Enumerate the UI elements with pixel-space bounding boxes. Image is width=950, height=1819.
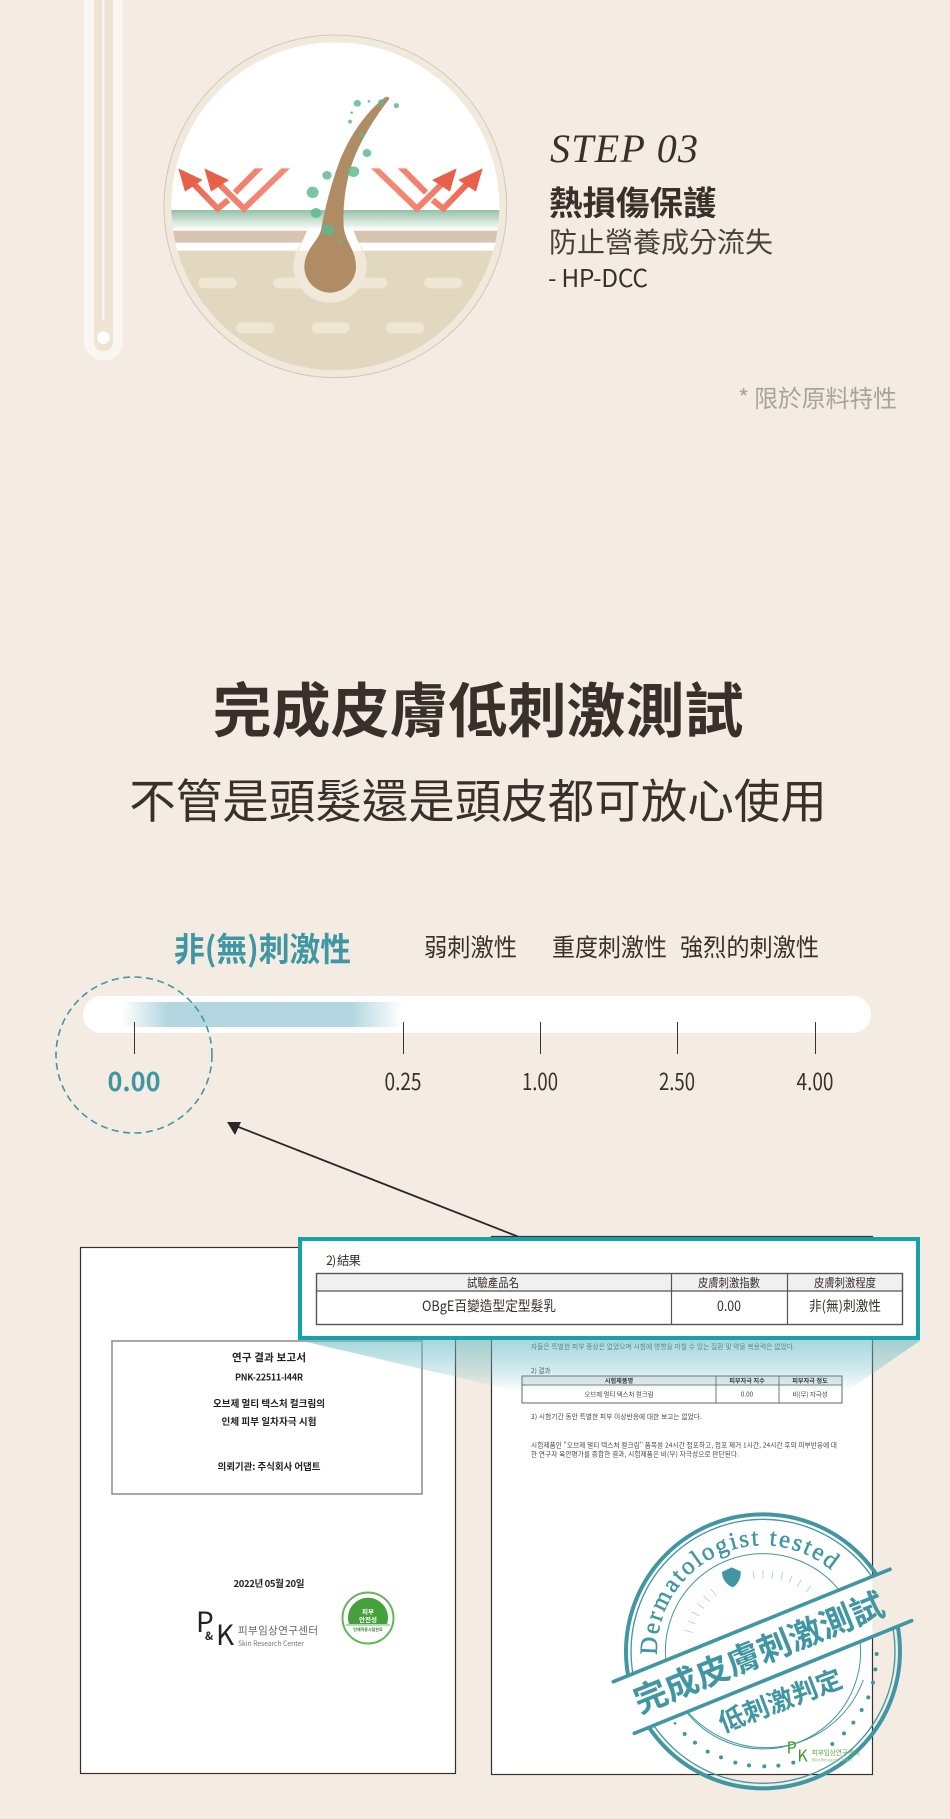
level labels: 重度刺激性 (552, 929, 667, 964)
document: results page: 시험제품인 "오브제 멀티 텍스처 컬크림" 품목을 24시간 첩포하고, 첩포 제거 1시간, 24시간 후의 피부반응에 대 (531, 1440, 837, 1450)
step text block: STEP 03 (550, 126, 698, 171)
footnote: * 限於原料特性 (738, 379, 897, 414)
stamp curved text: Dermatologist tested (640, 1531, 840, 1654)
P&K logo: K (216, 1614, 234, 1654)
step text block: 熱損傷保護 (549, 176, 716, 225)
P&K logo: P (196, 1601, 214, 1641)
small results table (522, 1376, 842, 1403)
green safety badge (342, 1592, 394, 1644)
level labels: 強烈的刺激性 (680, 929, 819, 964)
stamp: dermatologist tested (611, 1512, 914, 1790)
left reflected arrows (178, 161, 293, 209)
cover text: 인체 피부 일차자극 시험 (222, 1414, 316, 1428)
sub heading: 不管是頭髮還是頭皮都可放心使用 (129, 765, 827, 832)
scale values: 4.00 (796, 1063, 834, 1097)
small results table: 피부자극 정도 (792, 1376, 828, 1385)
cover text: 연구 결과 보고서 (232, 1350, 306, 1365)
P&K logo: 피부임상연구센터 (238, 1623, 318, 1638)
step text block: 防止營養成分流失 (549, 221, 773, 261)
small results table: 오브제 멀티 텍스처 컬크림 (585, 1390, 654, 1398)
small results table: 0.00 (741, 1390, 754, 1398)
stamp small P&K logo: Skin Research Center (812, 1756, 853, 1763)
green particles (307, 99, 399, 243)
cover text: 2022년 05월 20일 (234, 1576, 304, 1590)
level labels: 弱刺激性 (424, 929, 517, 964)
result table: 皮膚刺激指數 (698, 1274, 760, 1291)
document: results page: 2) 결과 (531, 1365, 550, 1375)
stamp band text: 完成皮膚刺激測試 (625, 1578, 891, 1723)
result table: 0.00 (717, 1296, 741, 1316)
main heading: 完成皮膚低刺激測試 (212, 664, 744, 749)
illustration: hair follicle with heat reflected (164, 35, 507, 378)
document: results page: 3) 시험기간 동안 특별한 피부 이상반응에 대한 보고는 없었다. (531, 1411, 702, 1421)
document: results page: 한 연구자 육안평가를 종합한 결과, 시험제품은 비(무) 자극성으로 판단된다. (531, 1448, 739, 1458)
P&K logo: & (205, 1628, 213, 1644)
stamp small P&K logo: P (787, 1734, 797, 1758)
result table: 非(無)刺激性 (809, 1296, 881, 1316)
level labels (174, 923, 819, 971)
document: results page: 자들은 특별한 피부 증상은 없었으며 시험에 영향을 미칠 수 있는 질환 및 약물 복용력은 없었다. (531, 1341, 795, 1351)
scale values: 1.00 (522, 1063, 558, 1097)
stamp tick marks (684, 1570, 811, 1632)
scale values: 0.25 (384, 1063, 422, 1097)
scale chart: irritation levels (56, 923, 871, 1133)
callout: enlarged result table: 2) 結果 (326, 1250, 361, 1269)
arrow to highlight (227, 1122, 519, 1237)
hair (304, 97, 389, 293)
stamp dots (674, 1652, 879, 1768)
cover text (213, 1350, 325, 1590)
scale values (108, 1062, 834, 1099)
result table: 試驗產品名 (467, 1274, 519, 1291)
stamp shield (722, 1567, 741, 1587)
dashed highlight circle (56, 977, 212, 1133)
small results table: 피부자극 지수 (729, 1376, 765, 1385)
stamp band background (613, 1569, 912, 1733)
P&K logo: Skin Research Center (238, 1639, 304, 1649)
right reflected arrows (368, 161, 483, 209)
stamp small P&K logo: 피부임상연구센터 (812, 1747, 860, 1757)
callout: enlarged result table (300, 1239, 918, 1338)
result table: 皮膚刺激程度 (814, 1274, 876, 1291)
cover text: PNK-22511-I44R (235, 1370, 303, 1384)
cover text: 오브제 멀티 텍스처 컬크림의 (213, 1396, 325, 1410)
stamp sub text: 低刺激判定 (713, 1659, 847, 1740)
cover text: 의뢰기관: 주식회사 어댑트 (218, 1459, 321, 1473)
highlighted range (122, 1002, 402, 1027)
green safety badge: 피부 (362, 1606, 374, 1616)
scale bar (83, 996, 871, 1033)
tick marks (134, 1022, 816, 1054)
stamp small P&K logo: K (797, 1743, 808, 1767)
zoom projection beam (298, 1340, 921, 1392)
green safety badge: 안전성 (359, 1614, 377, 1624)
stamp small P&K logo (787, 1734, 860, 1767)
small results table: 시험제품명 (605, 1376, 634, 1385)
step text block: - HP-DCC (548, 260, 648, 295)
level labels: 非(無)刺激性 (174, 923, 351, 971)
P&K logo (196, 1601, 318, 1654)
scale values: 2.50 (659, 1063, 695, 1097)
document: results page (492, 1236, 872, 1774)
green safety badge: 인체적용시험완료 (353, 1626, 383, 1633)
small results table: 비(무) 자극성 (792, 1390, 828, 1398)
cover title box (112, 1341, 422, 1494)
result table: OBgE百變造型定型髮乳 (422, 1296, 556, 1316)
document: report cover (80, 1248, 456, 1774)
step text block (548, 126, 773, 295)
scale values: 0.00 (108, 1062, 160, 1099)
result table (316, 1273, 903, 1325)
decorative tube (84, 0, 123, 360)
stamp rings (626, 1514, 900, 1788)
